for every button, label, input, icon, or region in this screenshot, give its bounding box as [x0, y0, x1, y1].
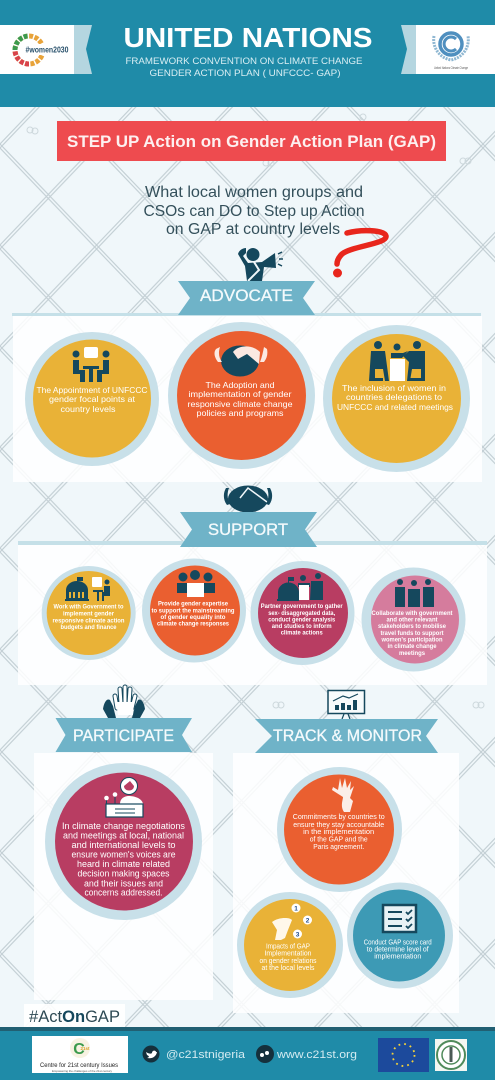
circle: work with government: responsive climate action — [52, 618, 125, 624]
circle: commitments by countries: of the GAP and the — [310, 834, 368, 844]
circle: impacts of GAP implementation: 2 — [306, 918, 310, 924]
circle: impacts of GAP implementation: Implementation — [264, 948, 312, 958]
circle: commitments by countries: Paris agreement. — [313, 842, 364, 851]
intro text: CSOs can DO to Step up Action — [144, 203, 364, 220]
circle: adoption of gender responsive policies: responsive climate change — [188, 399, 293, 409]
ribbon: participate — [56, 718, 192, 752]
circle: work with government: implement gender — [63, 610, 114, 618]
circle: commitments by countries: ensure they stay accountable — [293, 820, 384, 829]
circle: collaborate with government: stakeholders to mobilise — [378, 623, 446, 630]
circle: climate negotiations: ensure women's voices are — [72, 850, 176, 860]
icon: raised hands — [103, 687, 145, 718]
right logo tab: UNFCCC — [401, 25, 495, 74]
circle: impacts of GAP implementation: 1 — [294, 906, 298, 912]
circle: GAP score card: Conduct GAP score card — [364, 938, 432, 946]
title: UNITED NATIONS — [124, 22, 372, 53]
circle: collaborate with government: and other relevant — [386, 616, 438, 624]
circle: impacts of GAP implementation — [237, 892, 343, 998]
circle: climate negotiations: heard in climate related — [77, 859, 170, 869]
circle: climate negotiations: and international levels to — [72, 840, 176, 850]
logo: Centre for 21st century issues: C — [73, 1041, 85, 1058]
circle: UNFCCC focal points: country levels — [60, 404, 116, 414]
circle: work with government: Work with Government to — [54, 604, 124, 610]
circle: gender expertise: climate change responses — [157, 620, 229, 628]
subtitle: FRAMEWORK CONVENTION ON CLIMATE CHANGE — [126, 56, 362, 67]
ribbon: participate: PARTICIPATE — [73, 726, 174, 745]
circle: gender expertise: to support the mainstreaming — [152, 608, 235, 614]
circle: partner government: conduct gender analysis — [268, 616, 336, 624]
logo: Centre for 21st century issues: Centre for 21st century Issues — [40, 1063, 118, 1069]
circle: partner government: climate actions — [281, 630, 323, 636]
subtitle — [126, 56, 362, 79]
circle: UNFCCC focal points — [25, 332, 159, 466]
logo: Centre for 21st century issues: 21st — [80, 1046, 90, 1051]
logo: EU flag — [378, 1038, 429, 1072]
circle: inclusion of women in delegations: countries delegations to — [346, 392, 442, 402]
circle: GAP score card — [347, 882, 453, 988]
icon: handshake — [224, 486, 272, 512]
circle: commitments by countries — [277, 767, 402, 892]
circle: climate negotiations: decision making spaces — [78, 869, 170, 879]
red heading banner — [57, 121, 446, 161]
panel: track and monitor — [233, 719, 459, 1013]
circle: partner government: sex- disaggregated data, — [268, 610, 335, 617]
circle: GAP score card: implementation — [374, 952, 421, 960]
circle: commitments by countries: in the implementation — [303, 827, 374, 836]
circle: commitments by countries: Commitments by countries to — [293, 812, 385, 821]
circle: UNFCCC focal points: gender focal points at — [49, 394, 136, 404]
circle: gender expertise — [142, 558, 246, 662]
circle: impacts of GAP implementation: on gender relations — [260, 956, 317, 965]
circle: collaborate with government: Collaborate with government — [372, 610, 453, 617]
website: www.c21st.org — [276, 1049, 357, 1061]
ribbon: advocate — [178, 281, 315, 315]
circle: adoption of gender responsive policies — [168, 322, 315, 469]
circle: collaborate with government: women's participation — [381, 636, 443, 644]
ribbon: track and monitor — [255, 719, 438, 753]
circle: inclusion of women in delegations — [323, 325, 470, 472]
ribbon: support — [180, 512, 317, 547]
ribbon: advocate: ADVOCATE — [200, 286, 293, 305]
icon: person with megaphone — [238, 248, 283, 281]
left logo tab: women2030 — [0, 25, 92, 74]
circle: climate negotiations: and meetings at local, national — [63, 831, 184, 841]
circle: impacts of GAP implementation: at the local levels — [262, 963, 315, 972]
circle: adoption of gender responsive policies: policies and programs — [196, 408, 284, 418]
circle: partner government: Partner government to gather — [261, 603, 343, 610]
circle: gender expertise: of gender equality into — [160, 614, 226, 621]
left logo tab: women2030: #women2030 — [26, 46, 69, 54]
icon: chart on board — [328, 690, 364, 719]
panel: support — [18, 512, 487, 685]
circle: climate negotiations: In climate change negotiations — [62, 821, 185, 831]
circle: collaborate with government: in climate change — [388, 643, 437, 650]
ribbon: support: SUPPORT — [208, 520, 288, 539]
circle: adoption of gender responsive policies: implementation of gender — [188, 389, 292, 399]
intro text: on GAP at country levels — [166, 221, 340, 238]
twitter handle: @c21stnigeria — [166, 1049, 246, 1061]
circle: gender expertise: Provide gender expertise — [158, 600, 228, 608]
circle: inclusion of women in delegations: UNFCCC and related meetings — [337, 402, 453, 412]
panel: participate — [34, 718, 213, 1000]
hashtag: #ActOnGAP — [29, 1007, 120, 1026]
circle: partner government — [250, 561, 354, 665]
right logo tab: UNFCCC: United Nations Climate Change — [434, 65, 468, 70]
circle: collaborate with government: travel funds to support — [380, 630, 444, 637]
circle: inclusion of women in delegations: The inclusion of women in — [342, 383, 446, 393]
logo: Centre for 21st century issues — [32, 1036, 128, 1073]
circle: impacts of GAP implementation: Impacts of GAP — [266, 942, 310, 950]
icon: red question mark — [333, 231, 386, 278]
circle: climate negotiations: concerns addressed. — [84, 888, 162, 898]
circle: partner government: and studies to inform — [272, 623, 332, 630]
logo: partner emblem — [435, 1039, 467, 1071]
circle: work with government: budgets and finance — [60, 624, 117, 631]
subtitle: GENDER ACTION PLAN ( UNFCCC- GAP) — [150, 68, 340, 79]
circle: work with government — [42, 566, 136, 660]
intro text: What local women groups and — [145, 184, 363, 201]
intro text — [144, 184, 364, 238]
circle: climate negotiations — [45, 763, 202, 920]
footer band — [0, 1027, 495, 1080]
circle: adoption of gender responsive policies: The Adoption and — [206, 380, 275, 390]
twitter handle — [142, 1046, 246, 1062]
circle: impacts of GAP implementation: 3 — [296, 932, 300, 938]
circle: collaborate with government: meetings — [399, 650, 425, 657]
ribbon: track and monitor: TRACK & MONITOR — [273, 726, 422, 745]
circle: UNFCCC focal points: The Appointment of UNFCCC — [36, 385, 148, 395]
panel: advocate — [12, 281, 482, 482]
circle: GAP score card: to determine level of — [367, 944, 429, 954]
red heading banner: STEP UP Action on Gender Action Plan (GAP) — [67, 132, 436, 151]
website — [256, 1045, 357, 1063]
logo: Centre for 21st century issues: Empowering the challenges of the 21st century — [52, 1069, 112, 1073]
circle: collaborate with government — [362, 568, 466, 672]
circle: climate negotiations: and their issues and — [84, 878, 163, 888]
header band — [0, 0, 495, 107]
